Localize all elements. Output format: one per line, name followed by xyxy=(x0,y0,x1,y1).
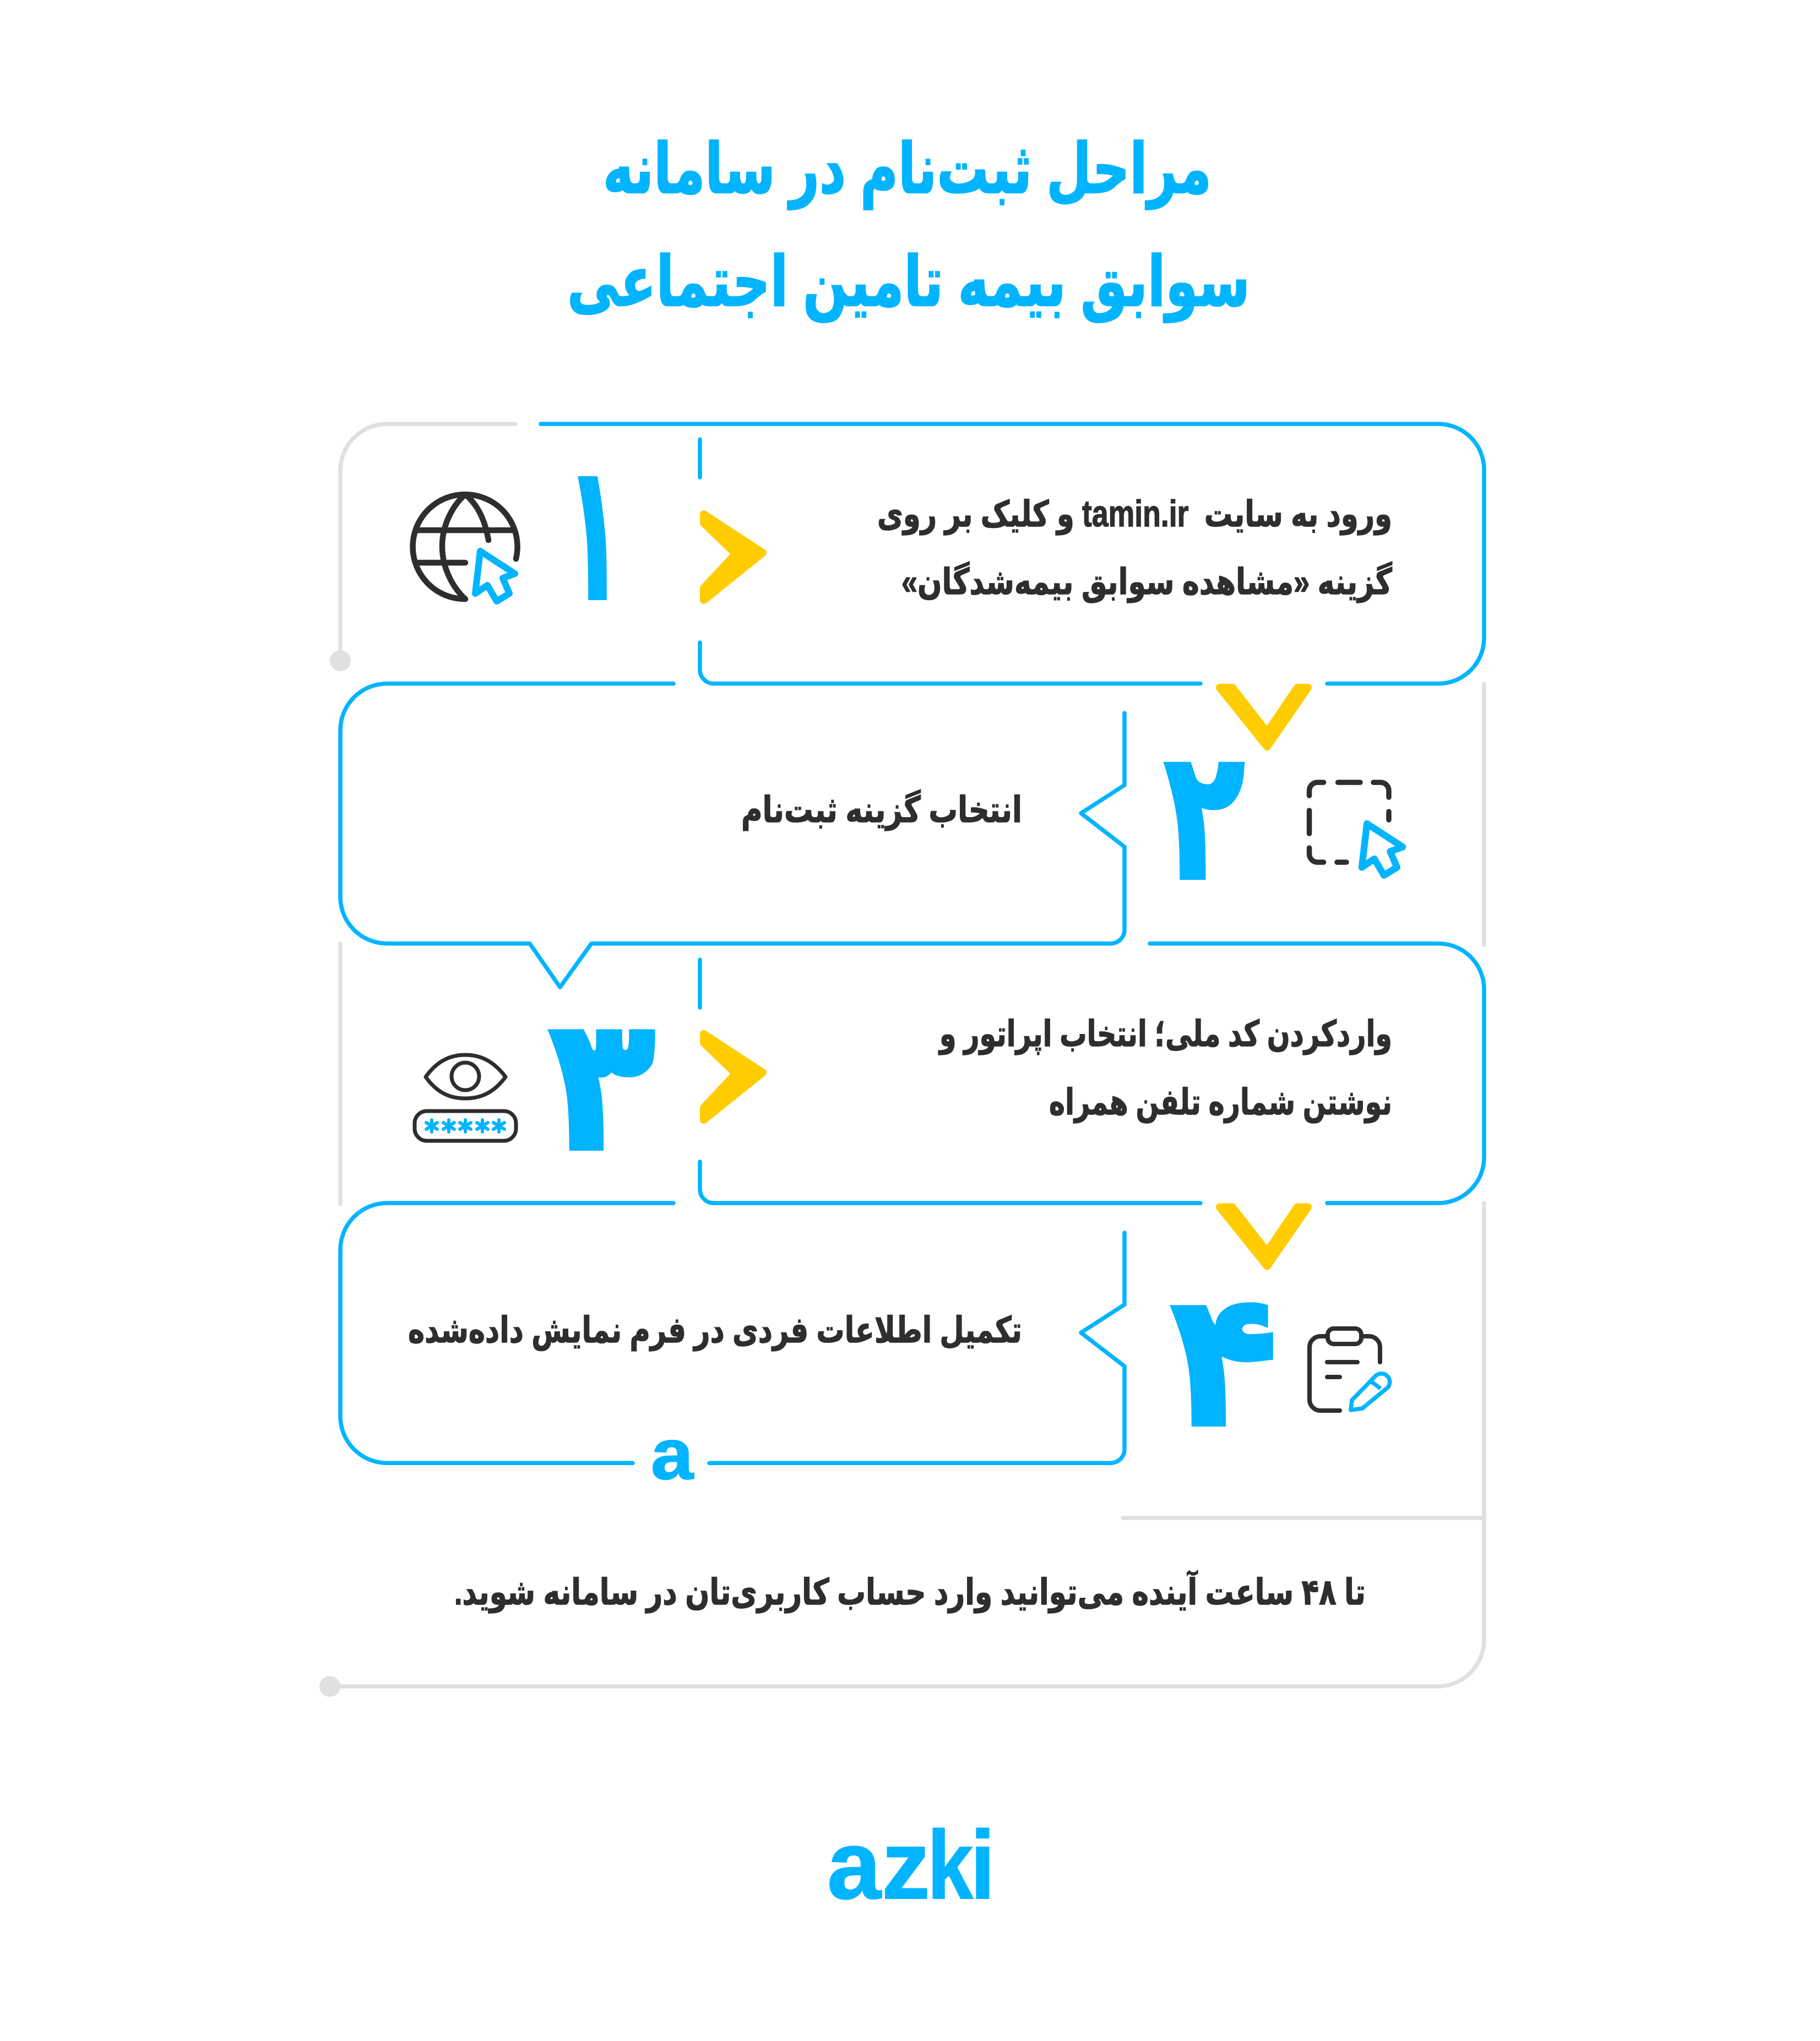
panel: step 2 xyxy=(340,684,1403,987)
panel: step 1 xyxy=(413,424,1484,684)
step 1 text xyxy=(877,493,1392,603)
grey connector: top left with dot xyxy=(330,424,515,671)
step 1 text: گزینه «مشاهده سوابق بیمه‌شدگان» xyxy=(901,561,1392,603)
step 2 text: انتخاب گزینه ثبت‌نام xyxy=(741,789,1022,831)
number 2: ۲ xyxy=(1164,711,1245,920)
step 3 outline xyxy=(700,944,1484,1203)
grey frame: footer with dot xyxy=(319,1203,1484,1697)
title: مراحل ثبت‌نام در سامانه xyxy=(603,130,1211,210)
step 3 text: واردکردن کد ملی؛ انتخاب اپراتور و xyxy=(938,1014,1392,1055)
step 4 text: تکمیل اطلاعات فردی در فرم نمایش داده‌شده xyxy=(408,1310,1022,1351)
arrow: yellow chevron 1 xyxy=(704,514,763,600)
logo: azki: z xyxy=(882,1811,930,1919)
panel: step 3 xyxy=(415,944,1484,1203)
arrow: yellow chevron 2 xyxy=(704,1034,763,1120)
grey connector: left of step 3 xyxy=(338,944,343,1204)
logo: azki: k xyxy=(927,1811,974,1919)
icon: globe with cursor xyxy=(413,494,518,601)
step 1 text: ورود به سایت tamin.ir و کلیک بر روی xyxy=(877,493,1392,535)
panel: step 4 xyxy=(340,1203,1390,1494)
number 4: ۴ xyxy=(1171,1254,1278,1468)
brand mark: a: a xyxy=(651,1414,694,1494)
title xyxy=(567,130,1250,323)
step 3 text: نوشتن شماره تلفن همراه xyxy=(1049,1082,1392,1123)
step 4 outline xyxy=(340,1203,1124,1463)
step 2 outline xyxy=(340,684,1124,987)
icon: clipboard with pencil xyxy=(1310,1329,1390,1411)
icon: eye with password xyxy=(415,1055,516,1141)
logo: azki xyxy=(827,1811,995,1919)
step 3 text xyxy=(938,1014,1392,1123)
step 1 outline xyxy=(541,424,1484,684)
footer note: تا ۴۸ ساعت آینده می‌توانید وارد حساب کاربری‌تان در سامانه شوید. xyxy=(454,1570,1366,1613)
number 3: ۳ xyxy=(548,978,655,1193)
password asterisks xyxy=(426,1120,504,1132)
grey connector: right of step 2 xyxy=(1482,684,1486,945)
arrow: yellow chevron down 2 xyxy=(1220,1207,1308,1266)
arrow: yellow chevron down 1 xyxy=(1220,688,1308,747)
panel: step 1: ۱ xyxy=(571,431,618,636)
icon: dashed selection with cursor xyxy=(1310,782,1403,875)
logo: azki: i xyxy=(970,1811,995,1919)
logo: azki: a xyxy=(827,1811,882,1919)
title: سوابق بیمه تامین اجتماعی xyxy=(567,243,1250,323)
